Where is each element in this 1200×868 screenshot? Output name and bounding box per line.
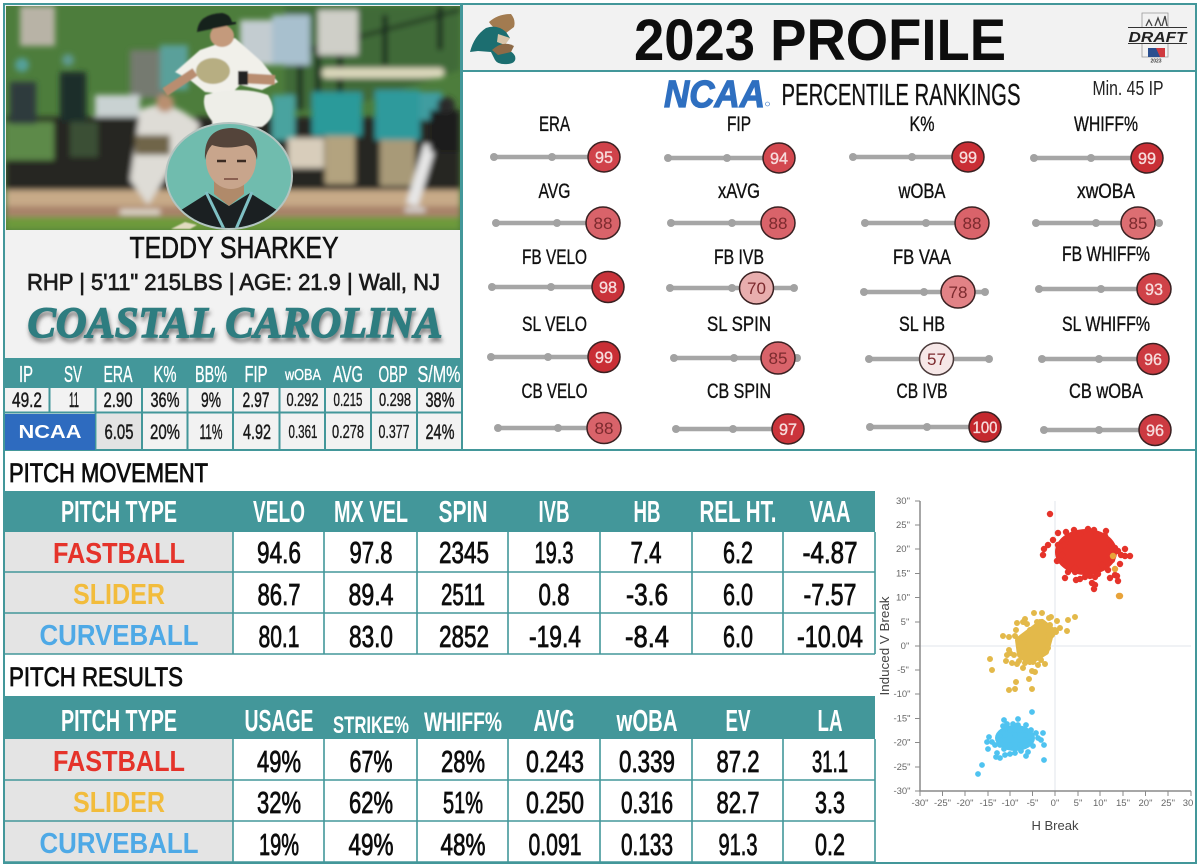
- heading: pitch movement: PITCH MOVEMENT: [9, 458, 208, 488]
- slider: FB IVB: FB IVB: [714, 246, 764, 269]
- slider: FIP: [664, 113, 795, 173]
- slider: WHIFF%: 99: [1138, 149, 1156, 168]
- y axis tick labels: 0": [901, 641, 909, 652]
- movement row: slider: -3.6: [626, 577, 668, 612]
- stat header: SV: [64, 361, 82, 387]
- movement table header: PITCH TYPE: [61, 494, 177, 529]
- NCAA average row: 11%: [200, 421, 222, 444]
- slider: CB VELO: CB VELO: [522, 380, 588, 403]
- slider: FB WHIFF%: 93: [1145, 280, 1163, 299]
- stat header: BB%: [195, 361, 227, 387]
- y axis tick labels: -10": [893, 689, 911, 700]
- slider: SL HB: [865, 313, 993, 375]
- panel: title header: [462, 4, 1196, 73]
- results row: fastball: [53, 744, 848, 779]
- slider: SL SPIN: [670, 313, 801, 374]
- x axis tick labels: -10": [1001, 798, 1019, 809]
- movement row: curveball: 83.0: [349, 619, 393, 654]
- slider: xAVG: 88: [768, 214, 788, 233]
- fastball points: [1043, 514, 1130, 596]
- slider: SL SPIN: 85: [768, 349, 788, 368]
- slider: FIP: FIP: [727, 113, 751, 136]
- NCAA average row: 0.278: [332, 422, 364, 442]
- stat header: FIP: [244, 361, 268, 387]
- slider: CB IVB: 100: [972, 418, 998, 437]
- results row: fastball: 0.339: [619, 744, 675, 779]
- results row: curveball: 0.133: [621, 827, 673, 862]
- results row: slider: SLIDER: [73, 787, 165, 819]
- slider: SL VELO: [487, 313, 620, 372]
- minimum innings note: Min. 45 IP: [1092, 78, 1164, 100]
- slider: WHIFF%: [1030, 113, 1163, 173]
- results row: curveball: 19%: [259, 827, 299, 862]
- x axis tick labels: -20": [956, 798, 974, 809]
- NCAA average row: 4.92: [243, 421, 271, 444]
- movement row: slider: 0.8: [538, 577, 570, 612]
- movement row: fastball: 6.2: [723, 535, 753, 570]
- player stat row: 0.215: [334, 390, 362, 410]
- slider: FB VELO: [488, 246, 624, 302]
- x axis tick labels: 20": [1139, 798, 1152, 809]
- results table header: PITCH TYPE: [61, 703, 177, 738]
- movement table header: MX VEL: [334, 494, 408, 529]
- movement row: curveball: 6.0: [723, 619, 753, 654]
- player stat row: 0.298: [379, 390, 411, 410]
- results row: fastball: 67%: [350, 744, 392, 779]
- slider: CB VELO: 88: [594, 419, 614, 438]
- movement table header: IVB: [538, 494, 570, 529]
- movement row: slider: -7.57: [804, 577, 856, 612]
- movement table header: VAA: [810, 494, 850, 529]
- percentile heading: PERCENTILE RANKINGS: [782, 77, 1020, 112]
- results row: slider: 51%: [443, 785, 483, 820]
- movement row: slider: 2511: [441, 577, 485, 612]
- y axis tick labels: -30": [893, 786, 911, 797]
- movement row: fastball: 94.6: [257, 535, 301, 570]
- slider: WHIFF%: WHIFF%: [1074, 113, 1138, 136]
- movement row: slider: SLIDER: [73, 579, 165, 611]
- x axis tick labels: -25": [934, 798, 951, 809]
- slider: FB VELO: FB VELO: [522, 246, 587, 269]
- NCAA average row: NCAA: [18, 422, 82, 442]
- y axis title: Induced V Break: [877, 596, 892, 696]
- results row: curveball: 49%: [348, 827, 394, 862]
- results row: curveball: 48%: [440, 827, 486, 862]
- slider: xwOBA: xwOBA: [1077, 180, 1135, 203]
- x axis tick labels: 5": [1074, 798, 1082, 809]
- results row: curveball: CURVEBALL: [40, 828, 198, 860]
- stat header: IP: [19, 361, 33, 387]
- movement row: slider: 89.4: [348, 577, 394, 612]
- movement table header: HB: [634, 494, 660, 529]
- slider: xwOBA: 85: [1128, 214, 1148, 233]
- slider: CB VELO: [494, 380, 621, 444]
- player stat row: 9%: [201, 389, 221, 412]
- stat table: [4, 358, 462, 450]
- slider: SL HB: 57: [927, 350, 946, 369]
- stat header: wOBA: [284, 367, 321, 384]
- results table header: LA: [818, 703, 842, 738]
- slider: wOBA: [861, 180, 989, 239]
- icon: NCAA logo: NCAA: [664, 74, 765, 116]
- player stat row: 36%: [150, 389, 180, 412]
- movement row: fastball: [53, 535, 858, 570]
- movement row: fastball: 19.3: [534, 535, 574, 570]
- icon: MLB Draft logo: DRAFT: [1128, 29, 1189, 46]
- player name: TEDDY SHARKEY: [130, 230, 338, 265]
- results row: slider: 3.3: [815, 785, 845, 820]
- movement row: fastball: -4.87: [802, 535, 858, 570]
- results row: fastball: 0.243: [526, 744, 584, 779]
- slider: FB VAA: FB VAA: [893, 246, 951, 269]
- movement row: curveball: -8.4: [625, 619, 669, 654]
- y axis tick labels: 10": [896, 592, 910, 604]
- player stat row: [12, 389, 454, 412]
- movement row: fastball: 7.4: [630, 535, 662, 570]
- slider: xAVG: [667, 180, 795, 239]
- movement table header: VELO: [253, 494, 305, 529]
- slider: CB wOBA: CB wOBA: [1069, 380, 1143, 403]
- slider: xAVG: xAVG: [718, 180, 760, 203]
- NCAA average row: 20%: [150, 421, 180, 444]
- movement row: fastball: FASTBALL: [53, 538, 185, 570]
- slider: CB SPIN: [672, 380, 804, 444]
- results row: slider: 0.316: [621, 785, 673, 820]
- results row: curveball: 91.3: [718, 827, 758, 862]
- slider: FIP: 94: [770, 149, 788, 168]
- stat header: K%: [154, 361, 176, 387]
- results row: slider: 0.250: [526, 785, 584, 820]
- table: pitch results: [4, 696, 875, 862]
- x axis tick labels: 0": [1051, 798, 1059, 809]
- slider: wOBA: wOBA: [898, 180, 946, 203]
- results table header: wOBA: [616, 703, 678, 738]
- slider: CB SPIN: 97: [779, 420, 797, 439]
- movement row: slider: 6.0: [723, 577, 753, 612]
- slider: CB wOBA: 96: [1146, 421, 1164, 440]
- player stat row: 38%: [426, 389, 454, 412]
- y axis tick labels: -5": [897, 665, 909, 676]
- team wordmark: COASTAL CAROLINA: [28, 300, 442, 347]
- movement row: fastball: 97.8: [350, 535, 392, 570]
- slider: wOBA: 88: [962, 214, 982, 233]
- curveball points: [978, 712, 1044, 774]
- NCAA average row: 24%: [426, 421, 454, 444]
- slider: K%: K%: [910, 113, 934, 136]
- slider: FB VAA: [860, 246, 989, 308]
- results row: fastball: 28%: [441, 744, 485, 779]
- player headshot: [166, 123, 292, 232]
- player action photo: [6, 6, 460, 230]
- results row: fastball: 49%: [257, 744, 301, 779]
- x axis tick labels: 10": [1093, 798, 1107, 809]
- slider: AVG: [492, 180, 620, 239]
- y axis tick labels: 30": [896, 496, 910, 507]
- x axis tick labels: 30: [1183, 798, 1193, 809]
- x axis tick labels: [911, 798, 1193, 809]
- y axis tick labels: -20": [893, 738, 911, 748]
- y axis tick labels: 5": [901, 617, 909, 628]
- player bio line: RHP | 5'11" 215LBS | AGE: 21.9 | Wall, NJ: [27, 269, 440, 295]
- slider: SL WHIFF%: [1038, 313, 1169, 374]
- x axis tick labels: 25": [1161, 798, 1175, 809]
- slider: SL VELO: SL VELO: [522, 313, 587, 336]
- movement row: curveball: -10.04: [797, 619, 863, 654]
- movement table header: SPIN: [438, 494, 488, 529]
- slider: FB IVB: [666, 246, 798, 304]
- slider: FB WHIFF%: FB WHIFF%: [1062, 243, 1150, 266]
- icon: MLB Draft logo: 2023: [1150, 58, 1162, 64]
- x axis tick labels: -5": [1027, 798, 1038, 809]
- stat header: OBP: [378, 361, 408, 387]
- y axis tick labels: 25": [896, 520, 910, 531]
- x axis tick labels: -15": [979, 798, 997, 809]
- results table header: WHIFF%: [424, 707, 502, 737]
- slider points: [990, 613, 1075, 690]
- x axis title: H Break: [1032, 818, 1079, 833]
- slider: FB IVB: 70: [747, 279, 766, 298]
- y axis tick labels: -25": [893, 762, 911, 773]
- slider: FB VAA: 78: [948, 283, 968, 302]
- slider: SL WHIFF%: 96: [1144, 350, 1162, 369]
- chart: pitch movement scatter: [877, 496, 1193, 833]
- results row: slider: 62%: [349, 785, 393, 820]
- results row: fastball: 31.1: [812, 744, 848, 779]
- stat header: [19, 361, 460, 387]
- slider: CB IVB: CB IVB: [896, 380, 948, 403]
- slider: SL HB: SL HB: [899, 313, 945, 336]
- results row: slider: [73, 785, 845, 820]
- player stat row: 2.90: [104, 389, 132, 412]
- results table header: STRIKE%: [333, 712, 409, 739]
- icon: MLB Draft logo: [1128, 13, 1189, 64]
- results table header: AVG: [534, 703, 574, 738]
- results row: curveball: 0.2: [815, 827, 845, 862]
- stat header: AVG: [333, 361, 363, 387]
- NCAA average row: 0.377: [378, 422, 410, 442]
- y axis tick labels: 15": [896, 568, 910, 580]
- movement row: curveball: [40, 619, 863, 654]
- slider: FB WHIFF%: [1035, 243, 1171, 304]
- slider: ERA: ERA: [539, 113, 570, 136]
- NCAA average row: 0.361: [288, 422, 318, 442]
- slider: CB wOBA: [1040, 380, 1171, 446]
- movement table header: REL HT.: [700, 494, 776, 529]
- movement row: slider: [73, 577, 856, 612]
- panel: lower section frame: [4, 450, 1196, 863]
- stat header: S/M%: [418, 361, 460, 387]
- slider: ERA: 95: [595, 148, 613, 167]
- player stat row: 49.2: [12, 389, 42, 412]
- stat header: ERA: [104, 361, 133, 387]
- movement row: fastball: 2345: [439, 535, 489, 570]
- slider: FB VELO: 98: [599, 278, 617, 297]
- movement table header: [61, 494, 850, 529]
- player stat row: 11: [69, 389, 79, 412]
- heading: pitch results: PITCH RESULTS: [9, 662, 183, 692]
- panel: player card: [3, 3, 461, 387]
- slider: SL VELO: 99: [595, 348, 613, 367]
- results table header: [61, 703, 842, 739]
- slider: AVG: 88: [594, 214, 612, 233]
- title: 2023 PROFILE: [634, 8, 1006, 73]
- movement row: curveball: CURVEBALL: [40, 620, 198, 652]
- results table header: EV: [726, 703, 751, 738]
- results row: slider: 32%: [257, 785, 301, 820]
- player stat row: 0.292: [286, 390, 318, 410]
- panel: percentile rankings: [462, 71, 1196, 450]
- x axis tick labels: -30": [911, 798, 929, 809]
- results row: fastball: FASTBALL: [53, 746, 185, 778]
- y axis tick labels: -15": [893, 714, 911, 724]
- slider: K%: [849, 113, 984, 172]
- results row: curveball: 0.091: [528, 827, 582, 862]
- slider: SL SPIN: SL SPIN: [707, 313, 771, 336]
- slider: AVG: AVG: [538, 180, 570, 203]
- results table header: USAGE: [244, 703, 314, 738]
- movement row: slider: 86.7: [258, 577, 300, 612]
- y axis tick labels: 20": [896, 544, 910, 555]
- x axis tick labels: 15": [1116, 798, 1130, 809]
- results row: curveball: [40, 827, 845, 862]
- player stat row: 2.97: [242, 389, 270, 412]
- movement row: curveball: 2852: [439, 619, 489, 654]
- slider: xwOBA: [1032, 180, 1163, 239]
- icon: Chanticleer logo: [470, 14, 515, 64]
- slider: K%: 99: [959, 148, 977, 167]
- slider: CB SPIN: CB SPIN: [707, 380, 771, 403]
- movement row: curveball: 80.1: [258, 619, 300, 654]
- movement row: curveball: -19.4: [529, 619, 581, 654]
- results row: fastball: 87.2: [716, 744, 760, 779]
- NCAA average row: 6.05: [104, 421, 134, 444]
- y axis tick labels: [893, 496, 911, 797]
- NCAA average row: [5, 414, 454, 450]
- slider: CB IVB: [866, 380, 1001, 442]
- results row: slider: 82.7: [716, 785, 760, 820]
- slider: ERA: [490, 113, 620, 172]
- slider: SL WHIFF%: SL WHIFF%: [1062, 313, 1150, 336]
- table: pitch movement: [4, 491, 875, 654]
